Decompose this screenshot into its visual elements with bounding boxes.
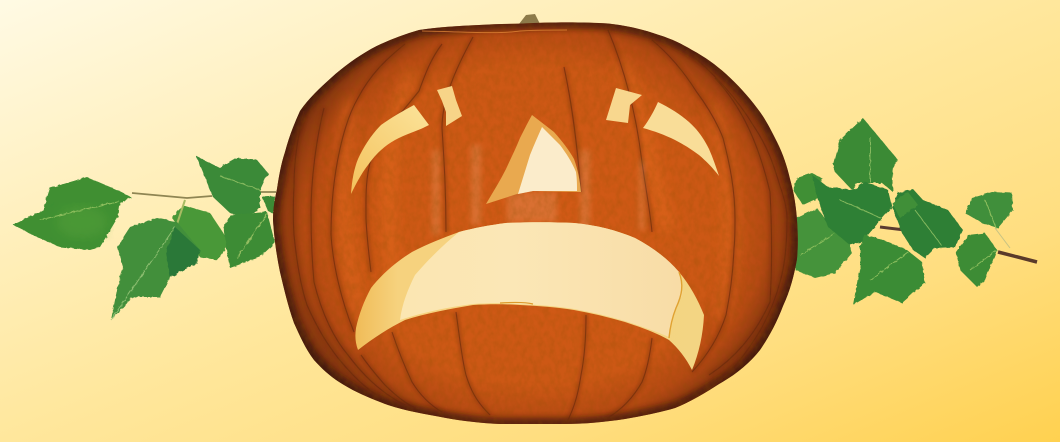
- leaf: lower left: [795, 208, 852, 278]
- leaf: far right top: [965, 192, 1013, 228]
- leaf stem: [177, 200, 185, 224]
- leaf: far left: [13, 177, 131, 250]
- right eyebrow cutout: [643, 102, 719, 176]
- skin texture: [274, 25, 798, 414]
- rib lines: [293, 30, 787, 422]
- leaf: top: [833, 118, 898, 192]
- nose cutout: [486, 115, 581, 204]
- thin stem: [995, 228, 1010, 248]
- soft rib shadows: [293, 30, 787, 422]
- leaf: lower left: [111, 218, 200, 320]
- right eye cutout: [606, 88, 642, 123]
- nose opening: [518, 127, 577, 194]
- pumpkin stem: [519, 14, 540, 24]
- pumpkin base: [260, 10, 810, 435]
- rib highlights: [343, 60, 731, 320]
- right twig: [880, 227, 905, 230]
- leaf: lower right: [224, 212, 275, 268]
- top rim line: [422, 30, 567, 33]
- leaf: light behind lower: [172, 205, 230, 260]
- leaf: upper right: [196, 156, 268, 218]
- mouth cutout: [355, 222, 704, 370]
- left branch with leaves: [13, 156, 276, 320]
- mouth lower rim: [500, 302, 533, 304]
- mouth crack: [669, 272, 682, 338]
- mouth flesh: [355, 222, 704, 370]
- twig end: [998, 252, 1037, 262]
- leaf: centre right: [892, 189, 963, 258]
- left eyebrow cutout: [351, 105, 429, 194]
- leaf: far right bottom: [956, 233, 997, 287]
- dark rim shading: [273, 22, 798, 424]
- mouth opening: [400, 222, 682, 337]
- pumpkin body: [260, 10, 810, 435]
- leaf: bottom: [853, 235, 925, 305]
- right branch with leaves: [793, 118, 1037, 305]
- left twig: [132, 192, 276, 198]
- nose outer flesh: [486, 115, 581, 204]
- leaf: small left: [793, 173, 822, 205]
- leaf: small behind: [262, 196, 275, 214]
- leaf: dark centre: [812, 175, 892, 245]
- sheen streaks: [432, 145, 645, 235]
- left eye cutout: [437, 86, 462, 126]
